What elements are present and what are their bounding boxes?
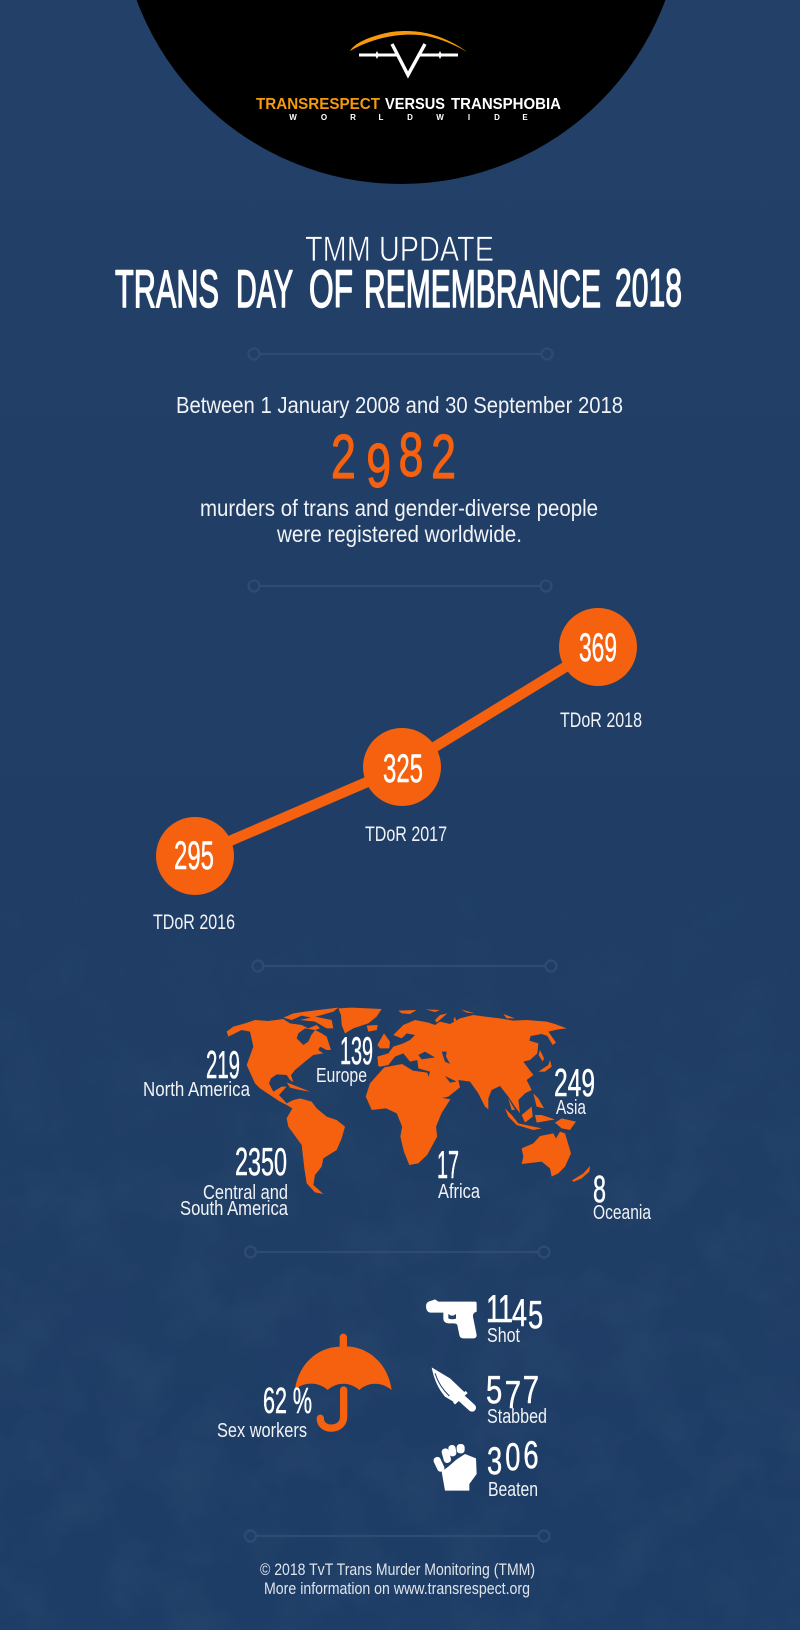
causes of death — [426, 1288, 547, 1501]
Oceania — [593, 1169, 652, 1224]
description: murders of trans and gender-diverse people — [200, 495, 598, 521]
logo wordmark: TRANSPHOBIA — [451, 96, 561, 113]
main title: REMEMBRANCE — [364, 260, 601, 319]
value: 62 % — [263, 1380, 312, 1421]
sex workers statistic — [217, 1334, 392, 1442]
icon: knife — [432, 1367, 472, 1408]
point 2017: 325 — [383, 747, 423, 791]
Central and South America: Central and — [203, 1182, 288, 1204]
stabbed — [432, 1367, 547, 1428]
beaten: Beaten — [488, 1479, 538, 1501]
icon: fist — [432, 1444, 477, 1491]
shot: 1145 — [486, 1288, 543, 1337]
North America: North America — [143, 1079, 251, 1101]
point 2016: 295 — [174, 834, 214, 878]
icon: umbrella — [295, 1334, 392, 1428]
main title: 2018 — [615, 259, 682, 318]
main title: TRANS — [115, 260, 219, 319]
Eurasia — [377, 1009, 567, 1113]
footer: © 2018 TvT Trans Murder Monitoring (TMM) — [260, 1561, 535, 1579]
point 2017 — [363, 728, 447, 846]
point 2018: TDoR 2018 — [560, 709, 642, 732]
Asia: 249 — [554, 1062, 595, 1105]
main title: OF — [309, 260, 353, 319]
point 2017: TDoR 2017 — [365, 823, 447, 846]
beaten — [432, 1434, 539, 1501]
title block — [115, 230, 682, 319]
Oceania: 8 — [593, 1169, 606, 1211]
footer — [260, 1561, 535, 1598]
footer: More information on www.transrespect.org — [264, 1580, 530, 1598]
stabbed: 577 — [486, 1369, 539, 1417]
shot — [426, 1288, 543, 1347]
header: black semicircle with logo — [119, 0, 683, 184]
Europe: Europe — [316, 1065, 367, 1087]
subtitle: TMM UPDATE — [305, 230, 494, 269]
Europe: 139 — [340, 1030, 373, 1073]
Southeast Asia and Oceania — [505, 1060, 590, 1182]
Asia: Asia — [556, 1097, 587, 1119]
Central and South America: 2350 — [235, 1141, 287, 1184]
point 2016: TDoR 2016 — [153, 911, 235, 934]
map labels — [143, 1030, 652, 1224]
main title: DAY — [236, 260, 293, 319]
Americas and Greenland — [213, 1008, 382, 1194]
Central and South America — [180, 1141, 289, 1220]
main title — [115, 259, 682, 319]
point 2018: 369 — [579, 626, 617, 670]
beaten: 306 — [487, 1434, 539, 1483]
North America — [143, 1044, 251, 1101]
logo wordmark: WORLDWIDE — [289, 113, 528, 122]
headline statistic: were registered worldwide. — [276, 521, 522, 547]
Oceania: Oceania — [593, 1202, 652, 1224]
headline statistic — [176, 392, 623, 547]
Africa: Africa — [438, 1181, 481, 1203]
point 2016 — [153, 817, 235, 934]
world map — [213, 1008, 590, 1194]
shot: Shot — [487, 1325, 520, 1347]
date range: Between 1 January 2008 and 30 September 2018 — [176, 392, 623, 418]
label: Sex workers — [217, 1420, 307, 1442]
big number 2982: 2982 — [331, 421, 456, 501]
logo wordmark: TRANSRESPECT — [256, 96, 380, 113]
point 2018 — [559, 608, 642, 732]
logo wordmark: VERSUS — [385, 96, 445, 113]
icon: gun — [426, 1299, 477, 1338]
North America: 219 — [206, 1044, 240, 1087]
logo mark — [350, 31, 467, 75]
stabbed: Stabbed — [487, 1406, 547, 1428]
Asia — [554, 1062, 595, 1119]
Africa — [366, 1064, 450, 1165]
Central and South America: South America — [180, 1198, 289, 1220]
logo wordmark — [256, 96, 561, 122]
Africa: 17 — [437, 1144, 459, 1187]
line chart: TDoR yearly counts — [153, 608, 642, 934]
Europe — [316, 1030, 373, 1087]
